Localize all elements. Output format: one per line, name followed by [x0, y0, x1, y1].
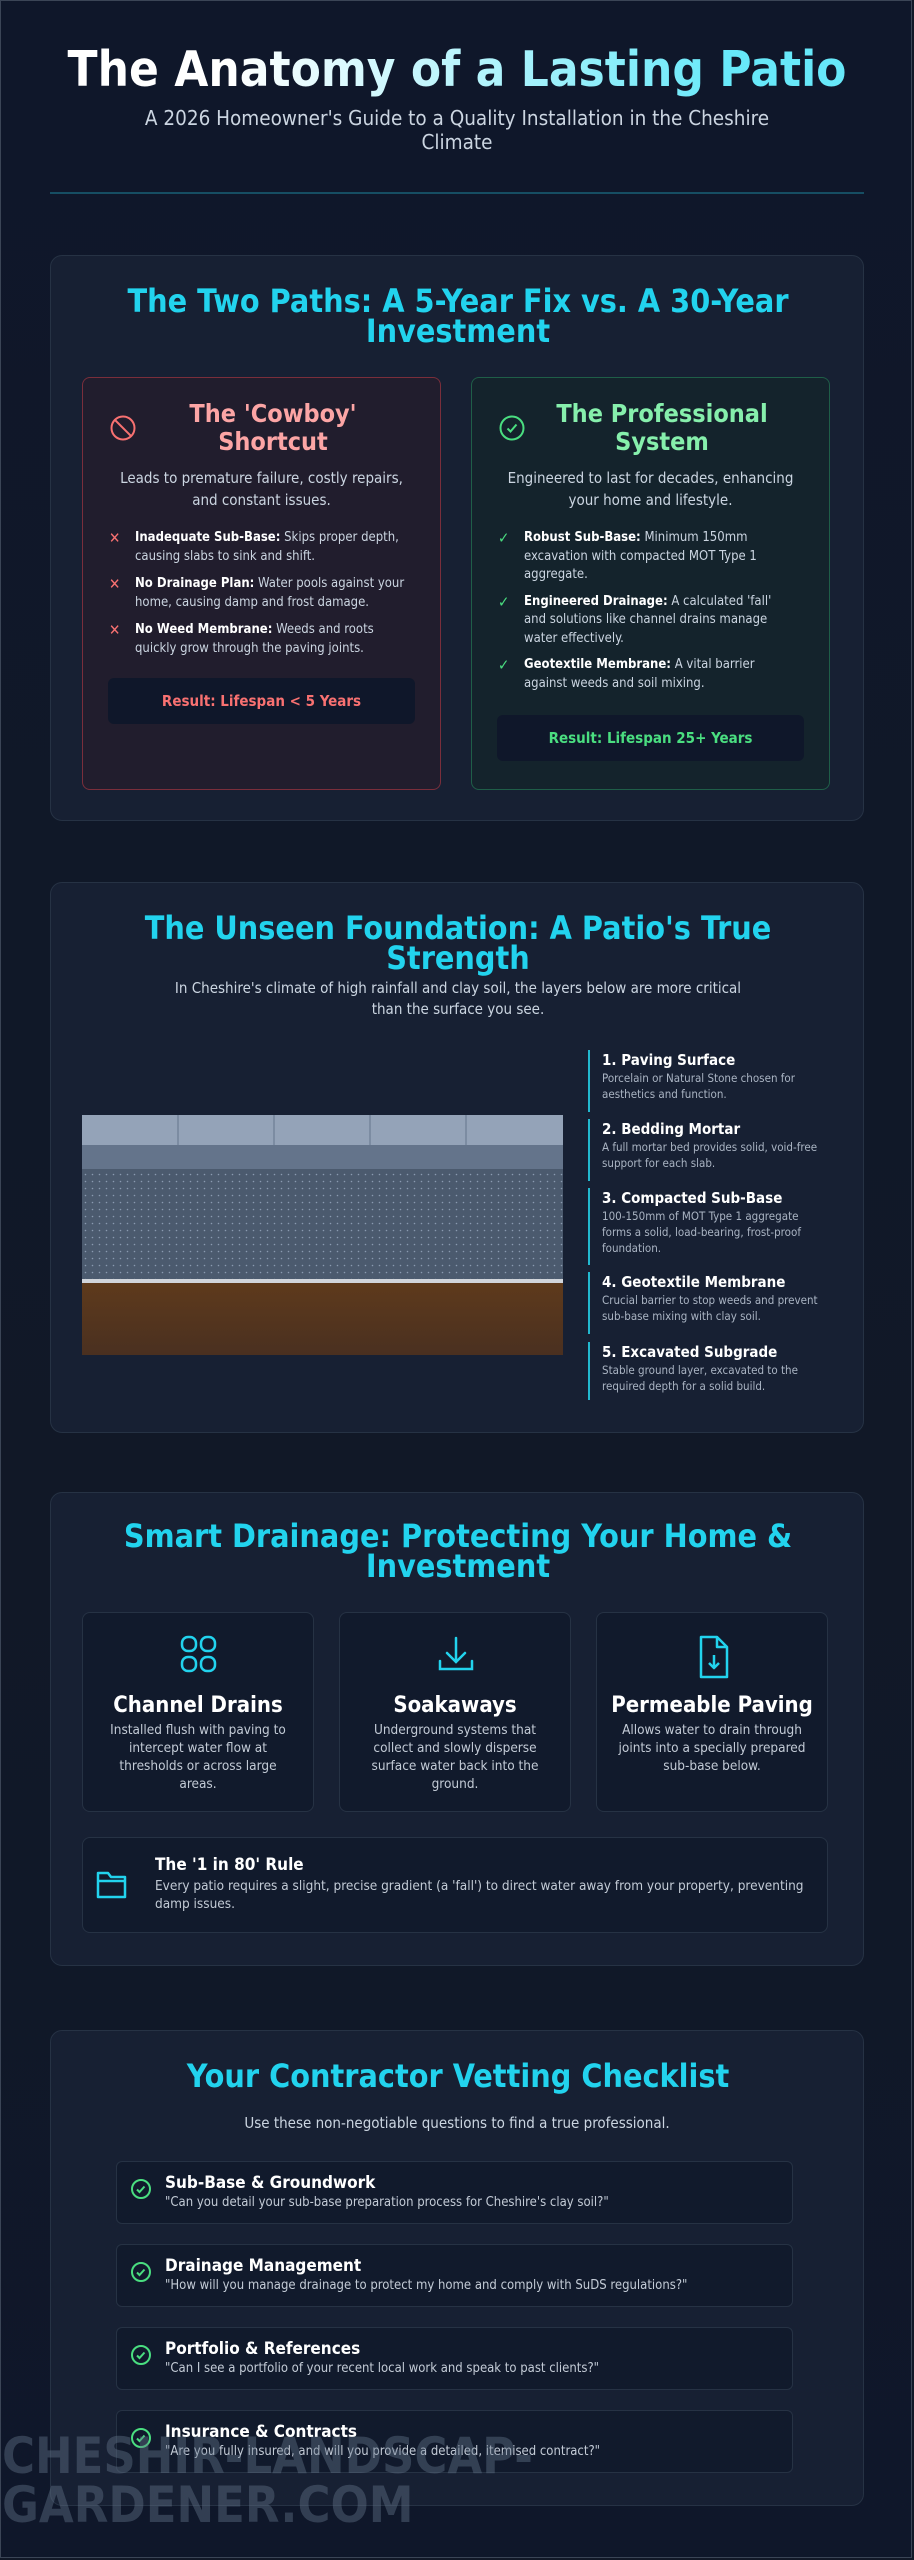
result: Result: Lifespan < 5 Years: [162, 692, 361, 710]
card title: [556, 399, 768, 456]
card: permeable paving: Permeable Paving: [611, 1693, 813, 1718]
legend: layers: 1. Paving Surface: [602, 1051, 735, 1069]
result: [497, 715, 804, 761]
checklist item 2: [116, 2244, 793, 2307]
text: A full mortar bed provides solid, void-free support for each slab.: [602, 1140, 817, 1170]
bullets: No Drainage Plan: Water pools against your home, causing damp and frost damage.: [135, 576, 404, 610]
heading: drainage: Smart Drainage: Protecting Your Home & Investment: [124, 1517, 792, 1585]
card title: The 'Cowboy': [189, 399, 357, 428]
bullets: Engineered Drainage: A calculated 'fall' and solutions like channel drains manage water effectively.: [524, 594, 771, 646]
panel: checklist: [50, 2030, 864, 2506]
checklist item 3: [116, 2327, 793, 2390]
heading: checklist: Your Contractor Vetting Checklist: [187, 2057, 729, 2095]
bullets: Robust Sub-Base: Minimum 150mm excavation with compacted MOT Type 1 aggregate.: [524, 530, 757, 582]
result: Result: Lifespan 25+ Years: [549, 729, 752, 747]
heading: foundation: The Unseen Foundation: A Patio's True Strength: [145, 909, 771, 977]
checklist item 4: [116, 2410, 793, 2473]
watermark: [2, 2427, 533, 2534]
checklist item 4: Insurance & Contracts: [165, 2422, 357, 2442]
card desc: Engineered to last for decades, enhancing your home and lifestyle.: [508, 469, 793, 509]
checklist item 2: "How will you manage drainage to protect my home and comply with SuDS regulations?": [165, 2278, 687, 2293]
card: permeable paving: Allows water to drain through joints into a specially prepared sub-base below.: [619, 1722, 805, 1774]
callout: 1 in 80 rule: The '1 in 80' Rule: [155, 1855, 304, 1875]
bullets: Geotextile Membrane: A vital barrier against weeds and soil mixing.: [524, 657, 755, 690]
card desc: Leads to premature failure, costly repairs, and constant issues.: [120, 469, 403, 509]
card title: The Professional: [556, 399, 768, 428]
text: 5. Excavated Subgrade: [602, 1343, 777, 1361]
text: Stable ground layer, excavated to the required depth for a solid build.: [602, 1363, 798, 1393]
card title: System: [615, 427, 709, 456]
watermark: CHESHIR-LANDSCAP-: [2, 2427, 533, 2485]
card: soakaways: Underground systems that collect and slowly disperse surface water back into the ground.: [372, 1722, 538, 1792]
bullets: [109, 529, 404, 656]
card: channel drains: [82, 1612, 314, 1812]
bullets: ✓: [498, 529, 509, 547]
text: 2. Bedding Mortar: [602, 1120, 740, 1138]
card: professional system: [471, 377, 830, 790]
bullets: Inadequate Sub-Base: Skips proper depth, causing slabs to sink and shift.: [135, 530, 399, 564]
intro text: In Cheshire's climate of high rainfall and clay soil, the layers below are more critical than the surface you see.: [175, 979, 741, 1018]
intro text: Use these non-negotiable questions to find a true professional.: [244, 2114, 670, 2132]
card: channel drains: Channel Drains: [113, 1693, 283, 1718]
bullets: ✓: [498, 592, 509, 610]
checklist item 2: Drainage Management: [165, 2256, 361, 2276]
card: soakaways: Soakaways: [393, 1693, 517, 1718]
icon: ban: [110, 416, 136, 440]
bullets: ✕: [109, 575, 120, 593]
card: channel drains: Installed flush with paving to intercept water flow at thresholds or across large areas.: [110, 1722, 286, 1792]
legend: layers: [588, 1050, 824, 1112]
checklist item 1: [116, 2161, 793, 2224]
icon: folder: [96, 1872, 126, 1898]
subtitle: A 2026 Homeowner's Guide to a Quality Installation in the Cheshire Climate: [145, 106, 769, 154]
checklist item 3: Portfolio & References: [165, 2339, 360, 2359]
checklist item 1: Sub-Base & Groundwork: [165, 2173, 375, 2193]
callout: 1 in 80 rule: [82, 1837, 828, 1933]
text: Crucial barrier to stop weeds and prevent sub-base mixing with clay soil.: [602, 1293, 818, 1323]
text: 4. Geotextile Membrane: [602, 1273, 785, 1291]
watermark: GARDENER.COM: [2, 2476, 414, 2534]
heading: two paths: The Two Paths: A 5-Year Fix vs. A 30-Year Investment: [127, 282, 789, 350]
callout: 1 in 80 rule: Every patio requires a slight, precise gradient (a 'fall') to direct water away from your property, preventing damp issues.: [155, 1878, 804, 1912]
bullets: ✕: [109, 621, 120, 639]
result: [108, 678, 415, 724]
bullets: ✕: [109, 529, 120, 547]
checklist item 4: "Are you fully insured, and will you provide a detailed, itemised contract?": [165, 2444, 600, 2459]
panel: unseen foundation: [50, 882, 864, 1433]
panel: smart drainage: [50, 1492, 864, 1966]
checklist item 3: "Can I see a portfolio of your recent local work and speak to past clients?": [165, 2361, 599, 2376]
bullets: No Weed Membrane: Weeds and roots quickly grow through the paving joints.: [135, 622, 374, 656]
card title: [189, 399, 357, 456]
bullets: ✓: [498, 656, 509, 674]
panel: two paths: [50, 255, 864, 821]
icon: check circle: [500, 416, 524, 440]
checklist item 1: "Can you detail your sub-base preparation process for Cheshire's clay soil?": [165, 2195, 609, 2210]
bullets: [498, 529, 771, 690]
diagram: patio layers: [82, 1115, 563, 1355]
legend: layers: Porcelain or Natural Stone chosen for aesthetics and function.: [602, 1071, 795, 1101]
card: permeable paving: [596, 1612, 828, 1812]
card: cowboy shortcut: [82, 377, 441, 790]
text: 100-150mm of MOT Type 1 aggregate forms a solid, load-bearing, frost-proof foundation.: [602, 1209, 801, 1255]
card title: Shortcut: [218, 427, 328, 456]
card: soakaways: [339, 1612, 571, 1812]
text: 3. Compacted Sub-Base: [602, 1189, 782, 1207]
title: The Anatomy of a Lasting Patio: [68, 41, 846, 98]
